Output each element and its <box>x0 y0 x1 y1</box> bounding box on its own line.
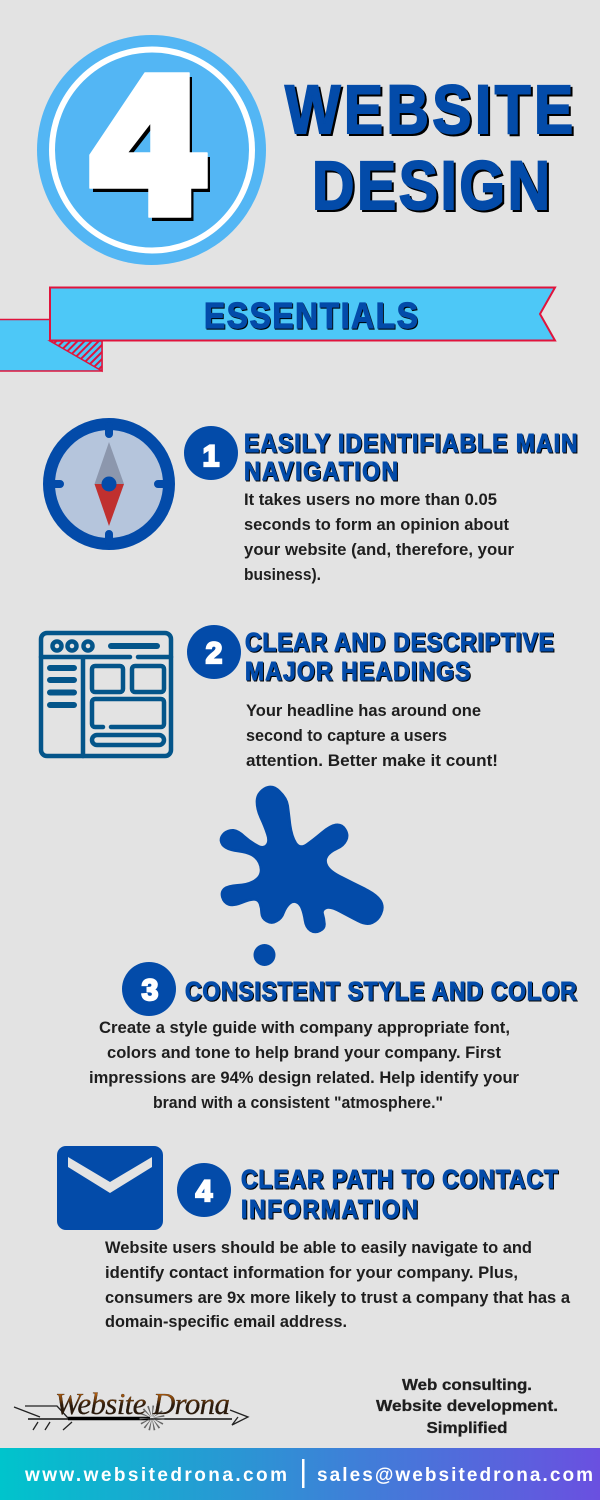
icon: envelope <box>57 1146 163 1230</box>
heading 4: INFORMATION <box>241 1196 418 1224</box>
panel: essential 2 headings <box>41 625 554 770</box>
ribbon banner: Essentials: ESSENTIALS <box>204 296 418 336</box>
footer bar <box>0 1448 600 1500</box>
text block 4: identify contact information for your company. Plus, <box>105 1263 518 1282</box>
icon: compass <box>49 424 169 544</box>
tagline: Web consulting. <box>402 1377 532 1394</box>
panel: essential 1 navigation <box>49 424 578 584</box>
footer contact text: sales@websitedrona.com <box>317 1465 593 1486</box>
number badge 4 <box>177 1163 231 1217</box>
heading 1: NAVIGATION <box>244 458 398 486</box>
heading 1: EASILY IDENTIFIABLE MAIN <box>244 430 578 458</box>
heading 2: CLEAR AND DESCRIPTIVE <box>245 629 554 657</box>
text block 2: Your headline has around one <box>246 701 481 720</box>
text block 2: second to capture a users <box>246 726 447 745</box>
text block 4: Website users should be able to easily navigate to and <box>105 1238 532 1257</box>
number badge 1 <box>184 426 238 480</box>
heading 3: CONSISTENT STYLE AND COLOR <box>185 978 577 1006</box>
panel: essential 3 style and color <box>89 787 577 1112</box>
text block 3: colors and tone to help brand your company. First <box>107 1043 501 1062</box>
text block 4: domain-specific email address. <box>105 1312 347 1331</box>
logo: Website Drona arrow: Website Drona <box>55 1386 230 1421</box>
text block 3: brand with a consistent "atmosphere." <box>153 1093 443 1112</box>
text block 2 <box>246 701 498 770</box>
tagline: Website development. <box>376 1398 558 1415</box>
ribbon banner: Essentials <box>0 288 555 371</box>
title: Website Design: DESIGN <box>312 147 550 224</box>
number badge 4: 4 <box>196 1175 213 1208</box>
text block 2: attention. Better make it count! <box>246 751 498 770</box>
title: Website Design: WEBSITE <box>285 71 573 148</box>
number badge 2 <box>187 625 241 679</box>
footer contact text: www.websitedrona.com <box>24 1465 287 1486</box>
title: Website Design <box>285 71 573 224</box>
number badge 2: 2 <box>206 637 222 670</box>
heading 2: MAJOR HEADINGS <box>245 658 470 686</box>
heading 4 <box>241 1166 558 1224</box>
heading 1 <box>244 430 578 486</box>
number badge 3: 3 <box>142 974 158 1007</box>
icon: paint splash <box>221 787 382 966</box>
icon: browser window <box>41 633 171 756</box>
logo: Website Drona arrow <box>14 1386 248 1430</box>
footer contact text <box>24 1459 593 1488</box>
tagline <box>376 1377 558 1437</box>
number badge 3 <box>122 962 176 1016</box>
text block 4: consumers are 9x more likely to trust a company that has a <box>105 1288 571 1307</box>
text block 3 <box>89 1018 519 1112</box>
badge: big number 4 in circle <box>37 35 266 265</box>
text block 1: seconds to form an opinion about <box>244 515 509 534</box>
text block 3: impressions are 94% design related. Help identify your <box>89 1068 519 1087</box>
heading 2 <box>245 629 554 686</box>
text block 1: It takes users no more than 0.05 <box>244 490 497 509</box>
number badge 1: 1 <box>203 440 219 473</box>
text block 1: your website (and, therefore, your <box>244 540 514 559</box>
text block 1: business). <box>244 565 321 584</box>
text block 1 <box>244 490 514 584</box>
text block 3: Create a style guide with company appropriate font, <box>99 1018 510 1037</box>
panel: essential 4 contact <box>57 1146 571 1331</box>
heading 4: CLEAR PATH TO CONTACT <box>241 1166 558 1194</box>
tagline: Simplified <box>426 1420 508 1437</box>
text block 4 <box>105 1238 571 1331</box>
